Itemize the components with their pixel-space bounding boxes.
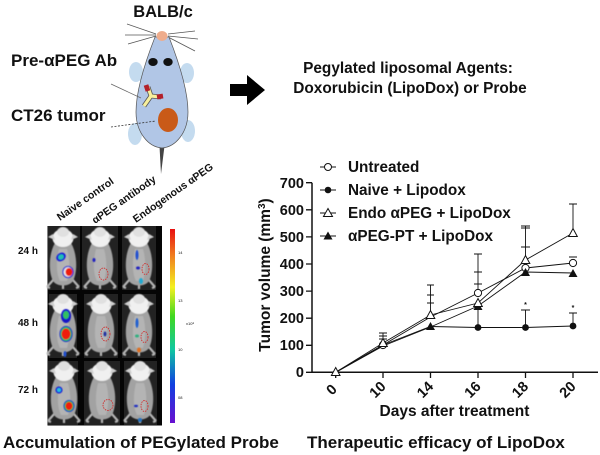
mouse illustration bbox=[111, 24, 198, 174]
markers: endo bbox=[331, 228, 577, 376]
colour scale bar: 13 bbox=[178, 298, 183, 303]
line chart: tumor volume bbox=[257, 176, 598, 420]
x tick labels bbox=[324, 379, 580, 402]
tumor bbox=[158, 108, 178, 132]
caption: therapeutic efficacy: Therapeutic efficacy of LipoDox bbox=[307, 433, 565, 452]
chart legend: Naive + Lipodox bbox=[348, 182, 466, 199]
colour scale bar: 08 bbox=[178, 395, 183, 400]
caption: accumulation: Accumulation of PEGylated Probe bbox=[3, 433, 279, 452]
y tick labels: 100 bbox=[280, 338, 304, 354]
x tick labels: 10 bbox=[367, 379, 390, 402]
x tick labels: 18 bbox=[509, 379, 532, 402]
colour scale bar: x10⁸ bbox=[186, 321, 194, 326]
imaging column labels bbox=[55, 161, 216, 226]
x axis title: Days after treatment bbox=[380, 403, 529, 420]
y tick labels bbox=[280, 176, 304, 381]
mouse diagram heading: BALB/c: BALB/c bbox=[133, 3, 193, 21]
markers: untreated bbox=[379, 259, 577, 349]
y tick labels: 300 bbox=[280, 284, 304, 300]
label: Pre-αPEG Ab: Pre-αPEG Ab bbox=[11, 51, 117, 70]
x tick labels: 20 bbox=[557, 379, 580, 402]
ears and feet bbox=[128, 62, 195, 145]
nose bbox=[156, 31, 168, 41]
y tick labels: 600 bbox=[280, 203, 304, 219]
body bbox=[136, 37, 188, 148]
signal hot spots bbox=[55, 250, 143, 422]
x tick labels: 0 bbox=[324, 382, 341, 399]
tail bbox=[160, 146, 164, 174]
significance stars: * bbox=[572, 305, 575, 312]
row labels bbox=[18, 246, 38, 396]
pointer lines bbox=[111, 84, 141, 98]
axes bbox=[312, 183, 598, 372]
colour scale bar: 14 bbox=[178, 250, 183, 255]
x tick labels: 14 bbox=[414, 379, 437, 402]
y tick labels: 700 bbox=[280, 176, 304, 192]
row labels: 72 h bbox=[18, 385, 38, 396]
error bars bbox=[379, 204, 577, 344]
y tick labels: 0 bbox=[296, 365, 304, 381]
series lines bbox=[336, 233, 573, 372]
row labels: 48 h bbox=[18, 318, 38, 329]
heading: pegylated agents: Doxorubicin (LipoDox) or Probe bbox=[293, 80, 527, 97]
y tick labels: 500 bbox=[280, 230, 304, 246]
imaging panel bbox=[47, 226, 162, 426]
icon: antibody bbox=[144, 85, 163, 106]
row labels: 24 h bbox=[18, 246, 38, 257]
y tick labels: 200 bbox=[280, 311, 304, 327]
markers: aPEG-PT bbox=[426, 268, 578, 330]
chart legend: Endo αPEG + LipoDox bbox=[348, 205, 511, 222]
colour scale bar: 10 bbox=[178, 347, 183, 352]
heading: pegylated agents: Pegylated liposomal Agents: bbox=[303, 60, 513, 77]
heading: pegylated agents bbox=[293, 60, 527, 97]
chart legend: Untreated bbox=[348, 159, 419, 176]
imaging column labels: αPEG antibody bbox=[90, 173, 159, 226]
tumor outlines bbox=[99, 264, 149, 412]
markers: naive bbox=[475, 323, 576, 331]
significance stars: * bbox=[524, 302, 527, 309]
whiskers bbox=[125, 24, 198, 51]
colour scale bar bbox=[170, 229, 194, 423]
label: CT26 tumor: CT26 tumor bbox=[11, 106, 106, 125]
imaging column labels: Endogenous αPEG bbox=[131, 161, 216, 225]
y axis title: Tumor volume (mm bbox=[257, 209, 274, 352]
image backgrounds bbox=[48, 226, 157, 425]
y axis title: ) bbox=[257, 198, 274, 203]
chart legend bbox=[320, 159, 511, 245]
y axis title: 3 bbox=[257, 203, 268, 209]
chart legend: αPEG-PT + LipoDox bbox=[348, 228, 493, 245]
imaging column labels: Naive control bbox=[55, 175, 116, 223]
significance stars bbox=[524, 302, 575, 312]
y tick labels: 400 bbox=[280, 257, 304, 273]
arrow bbox=[230, 75, 265, 105]
x tick labels: 16 bbox=[462, 379, 485, 402]
mice bbox=[47, 227, 156, 423]
eyes bbox=[148, 58, 158, 66]
